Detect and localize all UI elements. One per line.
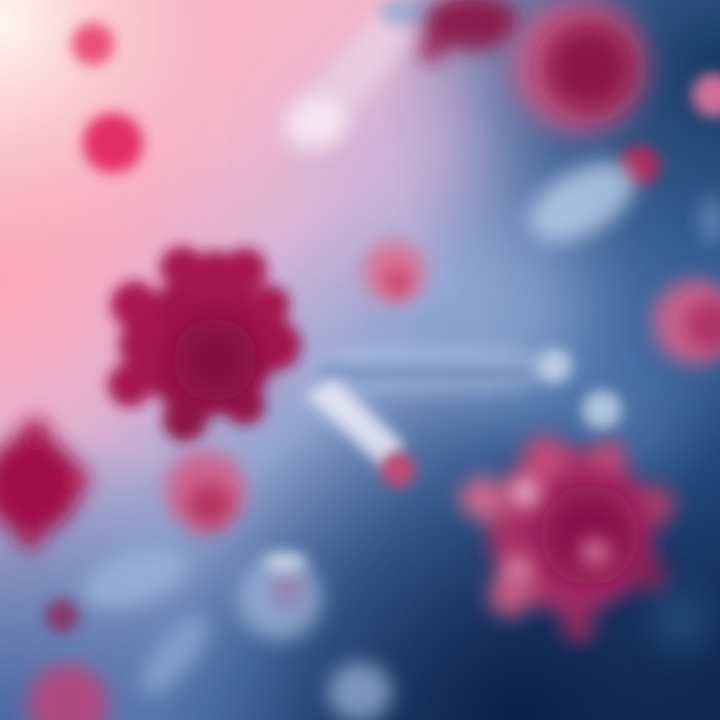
- pale shape right edge: [700, 196, 720, 244]
- small red cell lower left: [45, 599, 79, 633]
- pink cell right edge: [653, 280, 720, 364]
- pale bubble lower centre: [238, 552, 322, 640]
- pink cell lower left centre: [165, 450, 245, 530]
- small red cell upper right: [620, 145, 660, 185]
- virus cell top right: [512, 0, 644, 131]
- pale bubble bottom centre: [328, 662, 392, 720]
- pink cell right top edge: [692, 73, 720, 117]
- large virus cell centre left: [108, 246, 301, 442]
- horizontal tube centre: [320, 346, 622, 430]
- virus cell left edge: [0, 419, 89, 549]
- pink cell bottom left: [28, 664, 108, 720]
- virus cell top centre right: [420, 0, 520, 62]
- small pink cells top left: [72, 23, 143, 173]
- pale capsule bottom left centre: [131, 606, 219, 704]
- dark cell bottom right: [650, 586, 710, 654]
- diagonal pale capsule centre: [305, 378, 415, 487]
- pink cell centre: [364, 242, 424, 302]
- pale capsule lower left: [75, 536, 195, 620]
- pale capsule upper right: [516, 145, 648, 259]
- large virus cell lower right: [460, 436, 675, 643]
- capsule top centre: [273, 0, 440, 161]
